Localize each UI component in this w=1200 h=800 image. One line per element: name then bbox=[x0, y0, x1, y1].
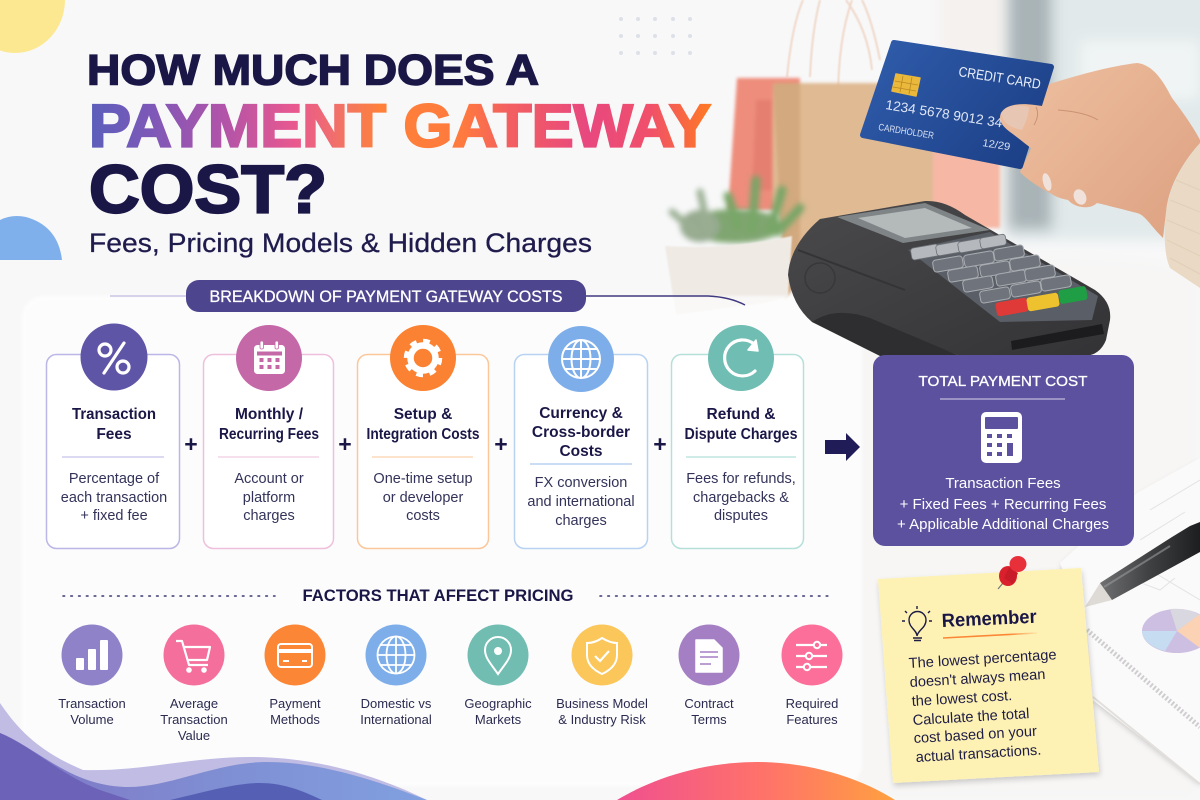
card description: and international bbox=[527, 494, 635, 510]
cost card: Setup & Integration Costs bbox=[358, 325, 488, 548]
factor: Contract Terms: Contract bbox=[684, 696, 734, 711]
note heading: Remember bbox=[941, 607, 1038, 632]
card description: Account or bbox=[234, 471, 304, 487]
card description: FX conversion bbox=[535, 475, 627, 491]
note body bbox=[908, 647, 1057, 766]
photo backdrop: store window and shopping bags bbox=[728, 0, 1200, 300]
cost card: Refund & Dispute Charges bbox=[672, 325, 804, 548]
factor: Geographic Markets: Markets bbox=[475, 712, 522, 727]
panel formula: Transaction Fees bbox=[945, 475, 1061, 492]
notebook with pie chart bbox=[1060, 458, 1200, 784]
factor: Required Features: Required bbox=[786, 696, 838, 711]
section pill: breakdown heading bbox=[110, 280, 745, 312]
icon: gear bbox=[390, 325, 456, 391]
subtitle: Fees, Pricing Models & Hidden Charges bbox=[89, 228, 592, 258]
title line 1: HOW MUCH DOES A bbox=[87, 46, 539, 94]
card heading: Dispute Charges bbox=[684, 426, 798, 443]
title bbox=[87, 46, 711, 228]
title line 2: gradient: PAYMENT GATEWAY bbox=[89, 92, 711, 160]
card description: charges bbox=[243, 508, 295, 524]
factor: Domestic vs International: Domestic vs bbox=[361, 696, 432, 711]
card label: CREDIT CARD bbox=[958, 63, 1042, 92]
factor: Payment Methods bbox=[264, 624, 326, 727]
card heading: Integration Costs bbox=[366, 426, 480, 443]
table surface bbox=[640, 255, 1200, 800]
card number: 1234 5678 9012 34 bbox=[885, 97, 1004, 130]
card description: charges bbox=[555, 513, 607, 529]
card description: + fixed fee bbox=[80, 508, 148, 524]
factor: Geographic Markets bbox=[464, 624, 532, 727]
card heading: Recurring Fees bbox=[219, 426, 319, 443]
note body: the lowest cost. bbox=[911, 688, 1013, 710]
plus sign: + bbox=[338, 431, 352, 457]
factor: Transaction Volume bbox=[58, 624, 126, 727]
white content panel bbox=[22, 296, 862, 786]
card heading: Costs bbox=[559, 443, 603, 460]
factor: Business Model & Industry Risk: & Industry Risk bbox=[558, 712, 646, 727]
card heading: Transaction bbox=[72, 406, 156, 423]
plus sign: + bbox=[184, 431, 198, 457]
section pill: breakdown heading: BREAKDOWN OF PAYMENT GATEWAY COSTS bbox=[210, 288, 562, 306]
card description: disputes bbox=[714, 508, 768, 524]
card expiry: 12/29 bbox=[982, 137, 1011, 153]
icon: globe bbox=[548, 326, 614, 392]
payment terminal bbox=[788, 201, 1110, 356]
plus sign: + bbox=[653, 431, 667, 457]
red push pin bbox=[998, 556, 1026, 589]
factor: Transaction Volume: Volume bbox=[70, 712, 114, 727]
card description: chargebacks & bbox=[693, 490, 789, 506]
factor: Payment Methods: Payment bbox=[269, 696, 321, 711]
card heading: Fees bbox=[96, 426, 132, 443]
cost card: Currency & Cross-border Costs bbox=[514, 326, 648, 548]
card description: costs bbox=[406, 508, 440, 524]
plus sign: + bbox=[494, 431, 508, 457]
factors heading: FACTORS THAT AFFECT PRICING bbox=[302, 586, 574, 605]
note body: actual transactions. bbox=[915, 743, 1042, 766]
card chip bbox=[892, 74, 920, 96]
total payment cost panel bbox=[873, 355, 1134, 546]
card description: Percentage of bbox=[69, 471, 160, 487]
card description: each transaction bbox=[61, 490, 167, 506]
cardholder: CARDHOLDER bbox=[878, 122, 935, 142]
panel formula: + Applicable Additional Charges bbox=[897, 516, 1109, 533]
pie chart bbox=[1142, 609, 1200, 653]
cost card: Monthly / Recurring Fees bbox=[204, 325, 334, 548]
card heading: Refund & bbox=[707, 406, 775, 423]
factor: Average Transaction Value bbox=[160, 624, 228, 743]
cost card: Transaction Fees bbox=[46, 324, 180, 548]
factor: Transaction Volume: Transaction bbox=[58, 696, 126, 711]
panel title: TOTAL PAYMENT COST bbox=[918, 373, 1088, 390]
plant in pot bbox=[665, 180, 800, 315]
decorative corner shape: blue bbox=[0, 216, 62, 260]
icon: light bulb bbox=[902, 606, 932, 640]
hand: sleeve and palm with fingers bbox=[1020, 63, 1200, 288]
factor: Domestic vs International bbox=[360, 624, 432, 727]
note body: cost based on your bbox=[913, 724, 1037, 747]
card heading: Setup & bbox=[394, 406, 452, 423]
icon: refresh bbox=[708, 325, 774, 391]
icon: calendar bbox=[236, 325, 302, 391]
thumb over card bbox=[1000, 104, 1120, 170]
bottom-right wave bbox=[617, 762, 895, 800]
factor: Average Transaction Value: Average bbox=[170, 696, 218, 711]
card description: or developer bbox=[383, 490, 463, 506]
factor: Required Features bbox=[782, 624, 842, 727]
card heading: Monthly / bbox=[235, 406, 304, 423]
factor: Domestic vs International: International bbox=[360, 712, 432, 727]
card heading: Cross-border bbox=[532, 424, 630, 441]
title line 3: COST? bbox=[89, 152, 327, 228]
factor: Business Model & Industry Risk bbox=[556, 624, 648, 727]
decorative dot grid bbox=[619, 17, 692, 55]
factor: Required Features: Features bbox=[786, 712, 838, 727]
icon: calculator bbox=[981, 412, 1022, 463]
arrow to total bbox=[825, 433, 860, 461]
factor: Payment Methods: Methods bbox=[270, 712, 320, 727]
card description: One-time setup bbox=[373, 471, 473, 487]
note body: The lowest percentage bbox=[908, 647, 1057, 672]
factor: Average Transaction Value: Transaction bbox=[160, 712, 228, 727]
factor: Average Transaction Value: Value bbox=[178, 728, 210, 743]
factor: Contract Terms: Terms bbox=[691, 712, 727, 727]
credit card bbox=[863, 43, 1051, 166]
card heading: Currency & bbox=[539, 405, 623, 422]
factor: Geographic Markets: Geographic bbox=[464, 696, 532, 711]
icon: percent bbox=[80, 324, 148, 390]
card description: platform bbox=[243, 490, 295, 506]
factor: Business Model & Industry Risk: Business Model bbox=[556, 696, 648, 711]
bottom-left wave bbox=[0, 703, 427, 800]
card description: Fees for refunds, bbox=[686, 471, 796, 487]
note body: doesn't always mean bbox=[909, 667, 1046, 691]
factor: Contract Terms bbox=[678, 624, 740, 727]
panel formula: + Fixed Fees + Recurring Fees bbox=[900, 496, 1106, 513]
note body: Calculate the total bbox=[912, 706, 1030, 729]
sticky note: Remember bbox=[878, 568, 1099, 783]
pen bbox=[1085, 522, 1200, 607]
decorative corner shape: yellow bbox=[0, 0, 65, 53]
